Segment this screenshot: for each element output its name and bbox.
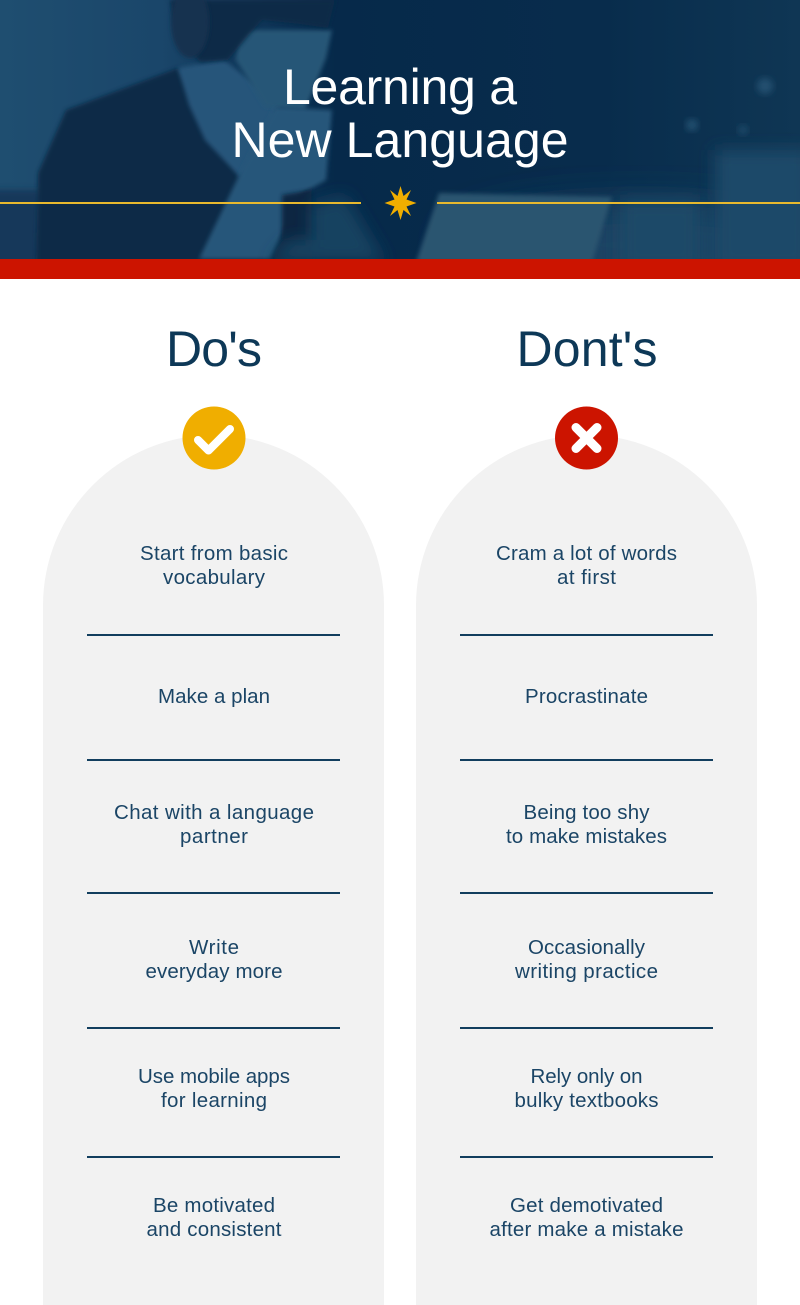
list of don'ts: Cram a lot of words xyxy=(496,542,677,565)
list of do's: Make a plan xyxy=(158,685,270,708)
list of do's: Write xyxy=(189,936,239,959)
list of don'ts: Procrastinate xyxy=(525,685,648,708)
list of do's: for learning xyxy=(161,1089,267,1112)
list of don'ts: Get demotivated xyxy=(510,1194,663,1217)
list of don'ts: Occasionally xyxy=(528,936,646,959)
list of do's xyxy=(87,542,340,1241)
list of don'ts: at first xyxy=(557,566,616,589)
list of do's: everyday more xyxy=(146,960,282,983)
title: Learning a xyxy=(283,59,517,115)
list of don'ts xyxy=(460,542,713,1241)
icon: cross mark xyxy=(555,406,618,470)
panel background: don'ts arch xyxy=(416,435,757,1305)
panel background: do's arch xyxy=(43,435,384,1305)
list of do's: and consistent xyxy=(146,1218,282,1241)
header photo: student at a laptop xyxy=(0,0,800,285)
title: New Language xyxy=(232,112,568,168)
list of do's: Chat with a language xyxy=(114,801,314,824)
icon: check mark xyxy=(182,406,246,470)
list of do's: Start from basic xyxy=(140,542,288,565)
panel: do's xyxy=(43,321,384,1305)
heading: do's: Do's xyxy=(166,321,262,377)
list of do's: Use mobile apps xyxy=(138,1065,290,1088)
divider with star xyxy=(0,186,800,220)
heading: don'ts: Dont's xyxy=(516,321,658,377)
list of don'ts: Being too shy xyxy=(524,801,650,824)
list of don'ts: writing practice xyxy=(514,960,658,983)
header banner xyxy=(0,0,800,285)
list of do's: vocabulary xyxy=(163,566,266,589)
list of don'ts: after make a mistake xyxy=(490,1218,684,1241)
list of don'ts: bulky textbooks xyxy=(514,1089,658,1112)
list of do's: partner xyxy=(180,825,248,848)
title xyxy=(232,59,568,168)
list of do's: Be motivated xyxy=(153,1194,275,1217)
list of don'ts: Rely only on xyxy=(530,1065,642,1088)
panel: don'ts xyxy=(416,321,757,1305)
red band xyxy=(0,259,800,279)
list of don'ts: to make mistakes xyxy=(506,825,667,848)
